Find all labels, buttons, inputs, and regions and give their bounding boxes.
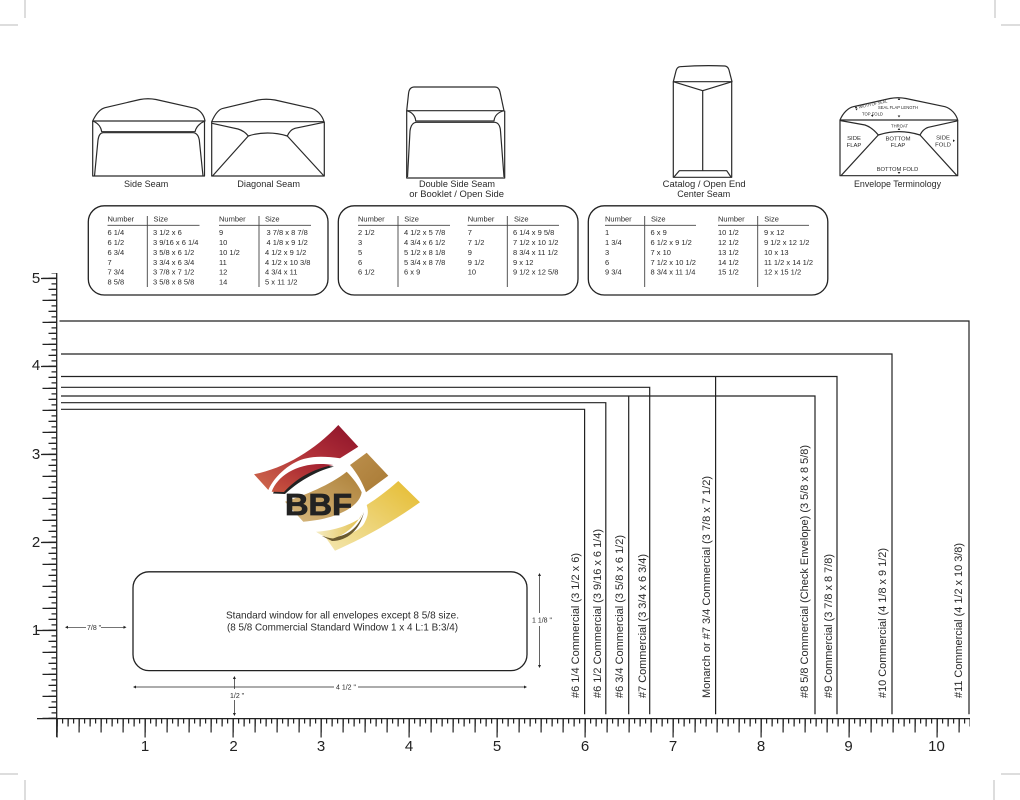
table: side and diagonal seam sizes: Size	[154, 214, 168, 224]
table: double side seam sizes	[338, 206, 578, 295]
dimension: 4 1/2 inch	[133, 684, 527, 692]
table: double side seam sizes: 8 3/4 x 11 1/2	[513, 248, 558, 257]
envelope size labels: #6 1/2 Commercial (3 9/16 x 6 1/4)	[592, 529, 604, 698]
table: side and diagonal seam sizes: 10 1/2	[219, 248, 240, 257]
caption: side seam: Side Seam	[124, 179, 168, 189]
standard window	[133, 572, 527, 671]
envelope size labels: #8 5/8 Commercial (Check Envelope) (3 5/8 x 8 5/8)	[799, 445, 811, 698]
envelope diagram: double side seam	[407, 87, 505, 199]
table: double side seam sizes: 4 1/2 x 5 7/8	[404, 228, 445, 237]
outline: #6 3/4 commercial	[628, 396, 630, 714]
vertical ruler: 3	[32, 446, 40, 463]
table: double side seam sizes: 9 1/2	[468, 258, 484, 267]
table: double side seam sizes: 6 1/4 x 9 5/8	[513, 228, 554, 237]
table: side and diagonal seam sizes: 6 1/4	[108, 228, 124, 237]
table: double side seam sizes: Size	[404, 214, 419, 224]
table: catalog center seam sizes: 11 1/2 x 14 1/2	[764, 258, 813, 267]
table: side and diagonal seam sizes: Size	[265, 214, 280, 224]
window note: Standard window for all envelopes except 8 5/8 size.	[226, 610, 459, 622]
horizontal ruler: 9	[844, 738, 853, 755]
terminology labels: BOTTOM FOLD	[877, 167, 918, 173]
horizontal ruler: 1	[141, 738, 149, 755]
table: side and diagonal seam sizes: 5 x 11 1/2	[265, 278, 297, 287]
table: catalog center seam sizes: 7 1/2 x 10 1/2	[650, 258, 696, 267]
horizontal ruler: 7	[669, 738, 677, 755]
table: side and diagonal seam sizes: 4 1/2 x 9 1/2	[265, 248, 306, 257]
table: double side seam sizes: 3	[358, 238, 362, 247]
table: side and diagonal seam sizes: 8 5/8	[108, 278, 124, 287]
horizontal ruler: 10	[928, 738, 945, 755]
horizontal ruler: 6	[581, 738, 589, 755]
terminology labels	[847, 98, 955, 174]
vertical ruler: 2	[32, 534, 40, 551]
table: catalog center seam sizes: 10 x 13	[764, 248, 789, 257]
table: catalog center seam sizes: 6	[605, 258, 609, 267]
envelope size labels: #11 Commercial (4 1/2 x 10 3/8)	[953, 543, 965, 698]
vertical ruler	[32, 270, 57, 737]
table: catalog center seam sizes: 3	[605, 248, 609, 257]
terminology labels: BOTTOM	[885, 137, 911, 143]
envelope diagram: side seam	[93, 99, 205, 189]
table: catalog center seam sizes: 12 x 15 1/2	[764, 268, 801, 277]
table: catalog center seam sizes: 15 1/2	[718, 268, 739, 277]
table: catalog center seam sizes: 6 x 9	[650, 228, 667, 237]
envelope diagram: diagonal seam	[212, 99, 324, 189]
table: catalog center seam sizes: 14 1/2	[718, 258, 739, 267]
table: double side seam sizes: 6 x 9	[404, 268, 420, 277]
terminology labels: SEAL FLAP LENGTH	[878, 105, 918, 110]
logo: red crescent	[273, 466, 334, 494]
terminology labels: SIDE	[847, 136, 861, 142]
table: side and diagonal seam sizes: 11	[219, 258, 227, 267]
outline: monarch	[715, 376, 717, 714]
table: side and diagonal seam sizes: 4 1/2 x 10 3/8	[265, 258, 310, 267]
table: catalog center seam sizes: 1	[605, 228, 609, 237]
table: side and diagonal seam sizes: 3 3/4 x 6 3/4	[153, 258, 194, 267]
table: side and diagonal seam sizes: 3 5/8 x 8 5/8	[153, 278, 194, 287]
logo: gold shape	[285, 472, 362, 522]
terminology labels: FLAP	[891, 143, 905, 149]
envelope size labels: #9 Commercial (3 7/8 x 8 7/8)	[823, 554, 835, 698]
logo: red band	[254, 425, 358, 490]
table: double side seam sizes: 7 1/2	[468, 238, 484, 247]
table: side and diagonal seam sizes: 7 3/4	[108, 268, 124, 277]
logo: yellow crescent	[322, 512, 364, 541]
table: catalog center seam sizes: 10 1/2	[718, 228, 739, 237]
table: double side seam sizes: Number	[358, 214, 385, 224]
dimension: 1 1/8 inch: 1 1/8 "	[532, 618, 553, 624]
horizontal ruler: 3	[317, 738, 325, 755]
table: catalog center seam sizes: 6 1/2 x 9 1/2	[650, 238, 692, 247]
table: catalog center seam sizes: Number	[718, 214, 745, 224]
table: catalog center seam sizes: Number	[605, 214, 632, 224]
table: double side seam sizes: 9 1/2 x 12 5/8	[513, 268, 558, 277]
table: side and diagonal seam sizes: 3 7/8 x 8 7/8	[266, 228, 308, 237]
table: catalog center seam sizes: 9 x 12	[764, 228, 784, 237]
table: catalog center seam sizes	[588, 206, 828, 295]
table: side and diagonal seam sizes: Number	[108, 214, 135, 224]
outline: #6 1/4 commercial	[61, 409, 585, 714]
table: double side seam sizes: 2 1/2	[358, 228, 375, 237]
table: catalog center seam sizes: 1 3/4	[605, 238, 622, 247]
table: side and diagonal seam sizes: 6 3/4	[108, 248, 124, 257]
dimension: 4 1/2 inch: 4 1/2 "	[336, 684, 357, 692]
horizontal ruler: 8	[757, 738, 765, 755]
horizontal ruler	[37, 719, 970, 755]
dimension: 7/8 inch	[65, 625, 126, 632]
envelope outline lines	[60, 321, 969, 714]
table: double side seam sizes: 5 1/2 x 8 1/8	[404, 248, 445, 257]
caption: booklet open side: or Booklet / Open Side	[409, 189, 504, 199]
window note: (8 5/8 Commercial Standard Window 1 x 4 L:1 B:3/4)	[227, 622, 458, 634]
terminology labels: FOLD	[935, 142, 951, 148]
table: catalog center seam sizes: Size	[651, 214, 666, 224]
table: side and diagonal seam sizes: 6 1/2	[108, 238, 124, 247]
BBF logo	[254, 425, 420, 551]
table: double side seam sizes: Number	[468, 214, 495, 224]
envelope size labels	[570, 445, 965, 698]
table: double side seam sizes: 7	[468, 228, 472, 237]
table: catalog center seam sizes: Size	[764, 214, 779, 224]
vertical ruler: 4	[32, 357, 40, 374]
dimension: 1/2 inch: 1/2 "	[230, 693, 245, 700]
caption: catalog open end: Catalog / Open End	[663, 179, 746, 189]
terminology labels: WIDTH OF SEAL	[858, 98, 888, 109]
table: side and diagonal seam sizes: 14	[219, 278, 227, 287]
table: double side seam sizes: 7 1/2 x 10 1/2	[513, 238, 558, 247]
vertical ruler: 1	[32, 622, 40, 639]
envelope size labels: Monarch or #7 3/4 Commercial (3 7/8 x 7 1/2)	[701, 476, 713, 698]
table: side and diagonal seam sizes: 3 5/8 x 6 1/2	[153, 248, 194, 257]
envelope diagram: catalog open end	[663, 66, 746, 199]
table: catalog center seam sizes: 9 1/2 x 12 1/2	[764, 238, 809, 247]
envelope size labels: #10 Commercial (4 1/8 x 9 1/2)	[877, 548, 889, 698]
table: side and diagonal seam sizes: 3 1/2 x 6	[153, 228, 182, 237]
table: catalog center seam sizes: 7 x 10	[650, 248, 671, 257]
table: catalog center seam sizes: 8 3/4 x 11 1/4	[650, 268, 695, 277]
table: side and diagonal seam sizes: 7	[108, 258, 112, 267]
horizontal ruler: 4	[405, 738, 413, 755]
table: double side seam sizes: 6	[358, 258, 362, 267]
table: side and diagonal seam sizes: 12	[219, 268, 227, 277]
table: catalog center seam sizes: 13 1/2	[718, 248, 739, 257]
table: side and diagonal seam sizes: 9	[219, 228, 223, 237]
caption: diagonal seam: Diagonal Seam	[237, 179, 300, 189]
table: catalog center seam sizes: 12 1/2	[718, 238, 739, 247]
table: catalog center seam sizes: 9 3/4	[605, 268, 622, 277]
dimension: 7/8 inch: 7/8 "	[87, 625, 102, 632]
table: double side seam sizes: 5	[358, 248, 362, 257]
outline: #11 commercial	[60, 321, 969, 714]
table: double side seam sizes: 9 x 12	[513, 258, 533, 267]
table: double side seam sizes: 6 1/2	[358, 268, 375, 277]
table: side and diagonal seam sizes: 3 9/16 x 6 1/4	[153, 238, 198, 247]
terminology labels: THROAT	[891, 124, 908, 130]
outline: #6 1/2 commercial	[61, 403, 606, 714]
table: side and diagonal seam sizes: 3 7/8 x 7 1/2	[153, 268, 194, 277]
vertical ruler: 5	[32, 270, 40, 287]
envelope size labels: #6 1/4 Commercial (3 1/2 x 6)	[570, 553, 582, 698]
envelope diagram: terminology	[840, 98, 958, 189]
caption: center seam: Center Seam	[677, 189, 730, 199]
table: side and diagonal seam sizes: Number	[219, 214, 246, 224]
horizontal ruler: 5	[493, 738, 501, 755]
table: double side seam sizes: 9	[468, 248, 472, 257]
terminology labels: TOP FOLD	[862, 112, 883, 118]
table: side and diagonal seam sizes	[88, 206, 328, 295]
envelope size labels: #6 3/4 Commercial (3 5/8 x 6 1/2)	[614, 535, 626, 698]
outline: #10 commercial	[61, 354, 892, 714]
outline: #7 commercial	[61, 387, 650, 714]
terminology labels: FLAP	[847, 143, 861, 149]
table: side and diagonal seam sizes: 4 3/4 x 11	[265, 268, 297, 277]
caption: envelope terminology: Envelope Terminology	[854, 179, 941, 189]
outline: #8 5/8 commercial	[61, 396, 815, 714]
table: double side seam sizes: 4 3/4 x 6 1/2	[404, 238, 445, 247]
logo: BBF wordmark: BBF	[285, 488, 352, 522]
horizontal ruler: 2	[229, 738, 238, 755]
table: double side seam sizes: 10	[468, 268, 476, 277]
outline: #9 commercial	[61, 376, 837, 714]
envelope size labels: #7 Commercial (3 3/4 x 6 3/4)	[637, 554, 649, 698]
table: double side seam sizes: 5 3/4 x 8 7/8	[404, 258, 445, 267]
table: side and diagonal seam sizes: 10	[219, 238, 227, 247]
terminology labels: SIDE	[936, 136, 950, 142]
dimension: 1 1/8 inch	[532, 573, 553, 668]
logo: yellow band	[326, 481, 420, 551]
dimension: 1/2 inch	[230, 676, 245, 716]
table: side and diagonal seam sizes: 4 1/8 x 9 1/2	[266, 238, 308, 247]
table: double side seam sizes: Size	[514, 214, 529, 224]
caption: double side seam: Double Side Seam	[419, 179, 495, 189]
window note	[226, 610, 459, 634]
logo: gold band	[350, 453, 388, 492]
